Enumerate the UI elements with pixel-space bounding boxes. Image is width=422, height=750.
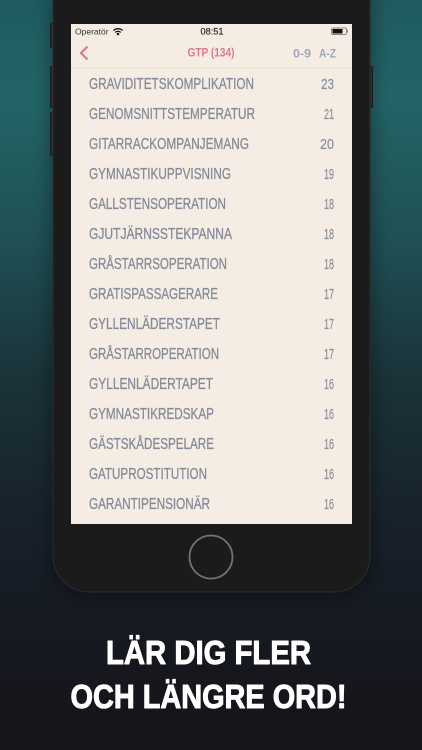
word list: GENOMSNITTSTEMPERATUR [89, 106, 255, 123]
sort options [293, 46, 336, 60]
word list: GYLLENLÄDERSTAPET [89, 316, 220, 333]
word list: 19 [324, 167, 334, 183]
app screen [71, 24, 352, 524]
status bar [75, 26, 348, 38]
word list: 20 [320, 137, 334, 153]
word list: 18 [324, 197, 334, 213]
icon: battery [332, 28, 348, 34]
word list: 16 [324, 467, 334, 483]
word list: GALLSTENSOPERATION [89, 196, 226, 213]
word list: GITARRACKOMPANJEMANG [89, 136, 249, 153]
sort options: A-Z [319, 46, 336, 60]
icon: back chevron [81, 46, 88, 60]
word list: GJUTJÄRNSSTEKPANNA [89, 226, 233, 243]
phone body [53, 0, 370, 592]
word list: 16 [324, 497, 334, 513]
word list: GATUPROSTITUTION [89, 466, 207, 483]
word list: GÄSTSKÅDESPELARE [89, 436, 214, 453]
home button [190, 536, 232, 578]
navigation bar [71, 46, 352, 68]
headline [70, 634, 346, 715]
word list: GYMNASTIKREDSKAP [89, 406, 214, 423]
word list: 18 [324, 227, 334, 243]
word list: 16 [324, 377, 334, 393]
word list: GRÅSTARRSOPERATION [89, 256, 227, 273]
word list: GRATISPASSAGERARE [89, 286, 218, 303]
word list: 21 [324, 107, 334, 123]
word list: 16 [324, 437, 334, 453]
status bar: 08:51 [200, 26, 224, 38]
headline: OCH LÄNGRE ORD! [70, 678, 346, 715]
word list [89, 76, 334, 513]
word list: GARANTIPENSIONÄR [89, 496, 210, 513]
word list: 16 [324, 407, 334, 423]
status bar: Operatör [75, 26, 109, 36]
sort options: 0-9 [293, 46, 311, 60]
word list: 17 [324, 287, 334, 303]
side buttons [50, 24, 372, 156]
word list: 17 [324, 347, 334, 363]
word list: 23 [321, 77, 334, 93]
phone [48, 0, 375, 600]
word list: GYLLENLÄDERTAPET [89, 376, 213, 393]
word list: GRAVIDITETSKOMPLIKATION [89, 76, 254, 93]
word list: GRÅSTARROPERATION [89, 346, 219, 363]
word list: GYMNASTIKUPPVISNING [89, 166, 231, 183]
word list: 17 [324, 317, 334, 333]
word list: 18 [324, 257, 334, 273]
headline: LÄR DIG FLER [106, 634, 311, 671]
nav title: GTP (134) [188, 46, 234, 60]
icon: wifi [114, 29, 122, 35]
